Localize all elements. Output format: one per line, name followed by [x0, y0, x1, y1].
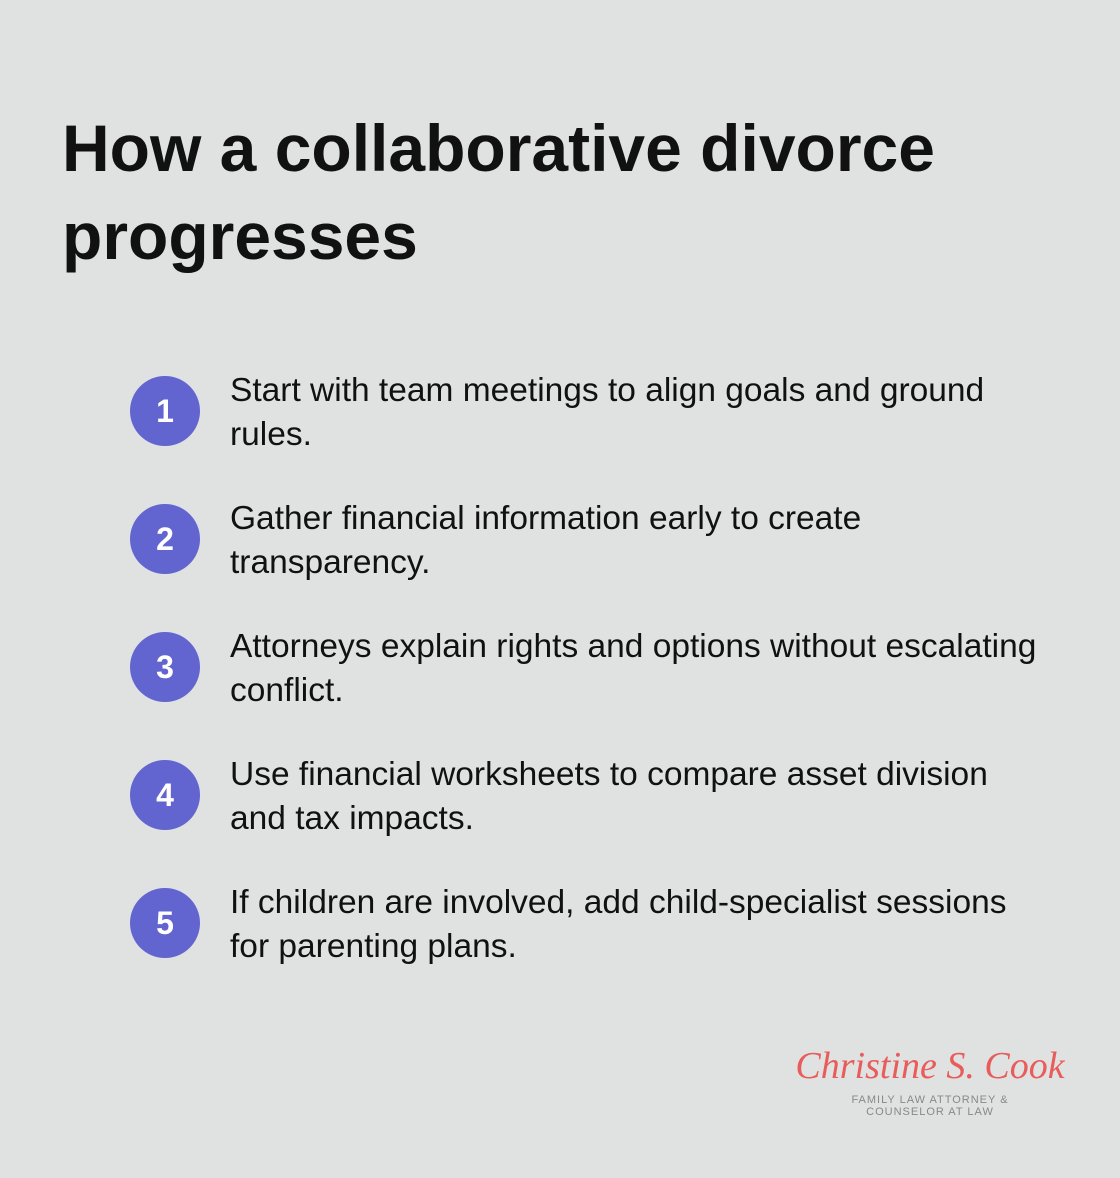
step 4 — [130, 756, 988, 837]
step 1: 1 — [156, 393, 174, 429]
step 2: 2 — [156, 521, 174, 557]
step 1: Start with team meetings to align goals and ground — [230, 372, 984, 409]
step 5: 5 — [156, 905, 174, 941]
title: How a collaborative divorce — [62, 111, 935, 185]
step 4: 4 — [156, 777, 174, 813]
step 5 — [130, 884, 1006, 965]
step 5: If children are involved, add child-specialist sessions — [230, 884, 1006, 921]
logo — [795, 1045, 1066, 1118]
step 4: and tax impacts. — [230, 800, 474, 837]
step 5: for parenting plans. — [230, 928, 517, 965]
step 3: Attorneys explain rights and options without escalating — [230, 628, 1036, 665]
step 2: Gather financial information early to create — [230, 500, 861, 537]
logo: Christine S. Cook — [795, 1045, 1065, 1087]
logo: FAMILY LAW ATTORNEY & — [851, 1094, 1009, 1106]
step 2: transparency. — [230, 544, 430, 581]
step 3: conflict. — [230, 672, 344, 709]
title — [62, 111, 935, 273]
step 4: Use financial worksheets to compare asset division — [230, 756, 988, 793]
logo: COUNSELOR AT LAW — [866, 1106, 994, 1118]
title: progresses — [62, 199, 418, 273]
step 3: 3 — [156, 649, 174, 685]
step 2 — [130, 500, 861, 581]
step 1: rules. — [230, 416, 312, 453]
step 3 — [130, 628, 1036, 709]
step 1 — [130, 372, 984, 453]
